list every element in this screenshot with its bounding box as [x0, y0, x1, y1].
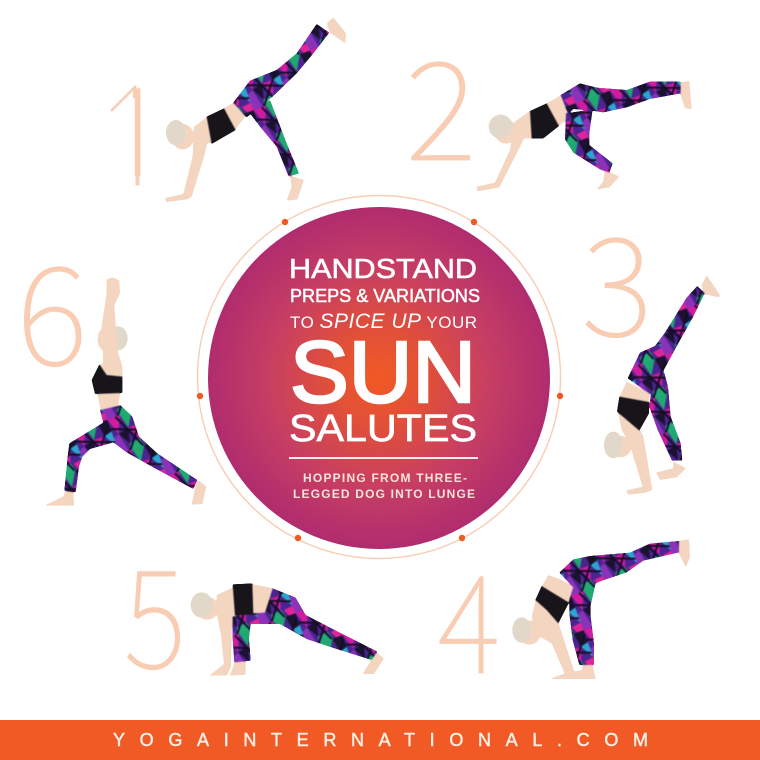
subtitle — [293, 471, 475, 501]
central gradient circle — [208, 207, 550, 549]
outer ring with dots — [197, 196, 563, 558]
step number 4: 4 — [438, 515, 500, 713]
title block: TO SPICE UP YOUR — [290, 310, 477, 333]
figure 2: knee toward chest — [477, 81, 692, 191]
figure 4: folded, leg lifted — [512, 539, 690, 679]
figure 1: three-legged plank, leg high — [165, 17, 346, 202]
footer url: YOGAINTERNATIONAL.COM — [113, 730, 648, 750]
step number 2: 2 — [405, 2, 477, 200]
title block: HANDSTAND — [289, 253, 477, 284]
subtitle: LEGGED DOG INTO LUNGE — [293, 487, 475, 501]
step number 3: 3 — [581, 178, 653, 376]
step number 6: 6 — [16, 207, 88, 405]
figure 5: low lunge, hands down — [191, 583, 384, 676]
step number 1: 1 — [99, 27, 171, 225]
subtitle: HOPPING FROM THREE- — [303, 471, 467, 485]
title block: SUN — [290, 324, 476, 421]
footer band — [0, 720, 760, 760]
title block: PREPS & VARIATIONS — [290, 286, 480, 306]
figure 6: high lunge, arm raised — [44, 277, 206, 506]
title block: SALUTES — [289, 408, 477, 450]
divider — [289, 457, 478, 459]
title block — [289, 253, 480, 450]
step number 5: 5 — [124, 509, 186, 707]
figure 3: hop toward handstand — [604, 275, 720, 495]
